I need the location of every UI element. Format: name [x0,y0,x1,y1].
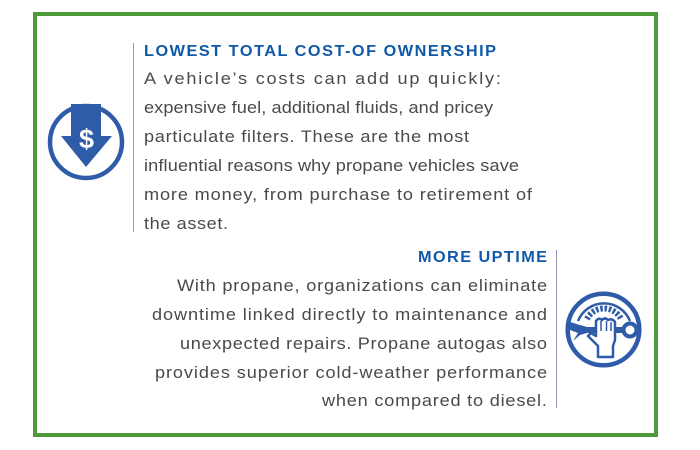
text block: cost description: influential reasons why propane vehicles save [144,156,519,175]
text block: cost description: more money, from purchase to retirement of [144,185,532,204]
text block: uptime description: provides superior cold-weather performance [155,363,547,382]
text block: uptime description: downtime linked directly to maintenance and [152,305,547,324]
text block: uptime description: unexpected repairs. Propane autogas also [180,334,547,353]
text block: cost description [144,69,532,233]
heading: lowest total cost of ownership: LOWEST TOTAL COST-OF OWNERSHIP [144,43,496,60]
icon: dollar down arrow [50,104,122,178]
text block: cost description: the asset. [144,214,228,233]
heading: more uptime: MORE UPTIME [418,249,547,266]
text block: cost description: particulate filters. These are the most [144,127,469,146]
left divider [133,43,134,232]
text block: uptime description: With propane, organizations can eliminate [177,276,547,295]
icon: hand holding wrench with gear [568,294,639,365]
panel: lowest total cost of ownership [50,43,532,233]
text block: cost description: A vehicle’s costs can add up quickly: [144,69,501,88]
right divider [556,250,557,408]
text block: uptime description: when compared to diesel. [321,391,547,410]
text block: uptime description [152,276,547,410]
text block: cost description: expensive fuel, additional fluids, and pricey [144,98,493,117]
icon: dollar down arrow: $ [79,124,94,154]
panel: more uptime [152,249,639,410]
